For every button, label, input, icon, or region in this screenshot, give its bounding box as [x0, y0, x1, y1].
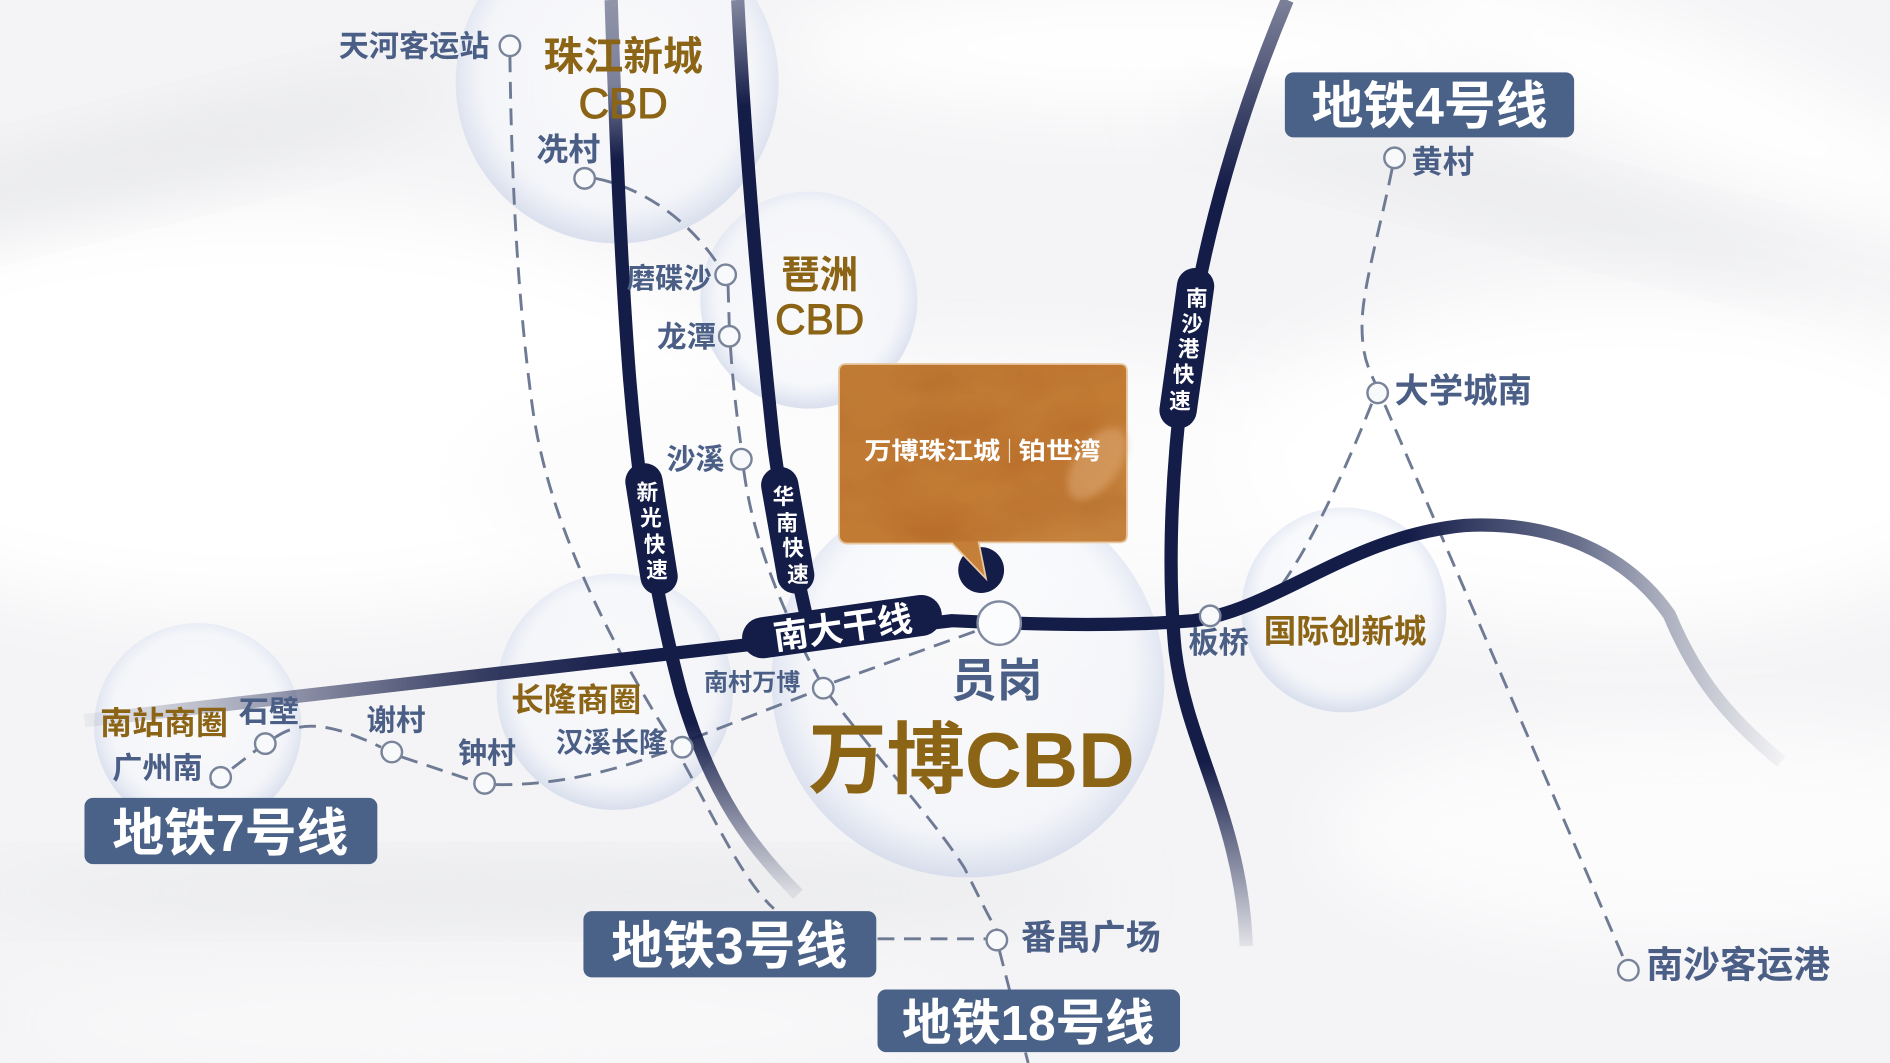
bubble: 南站: [94, 623, 301, 830]
pill label 华南快速: [773, 484, 809, 587]
pill label 华南快速: 华: [773, 484, 794, 509]
station labels: 大学城南: [1395, 373, 1532, 411]
pill label 南沙港快速: 港: [1178, 337, 1200, 362]
pill: 南沙港快速: [1157, 266, 1217, 431]
bubble: 长隆: [497, 574, 733, 810]
badge: 地铁4号线: 地铁4号线: [1311, 77, 1548, 135]
station labels: 石壁: [239, 695, 299, 729]
pill label 南大干线: 南大干线: [771, 599, 915, 657]
station labels: 番禺广场: [1021, 919, 1161, 958]
road: 南大干线: [84, 525, 1781, 762]
pill label 南沙港快速: [1169, 286, 1208, 414]
pill: 华南快速: [758, 464, 817, 596]
pill: 新光快速: [623, 461, 680, 597]
gold labels: CBD: [579, 80, 668, 127]
station labels: 板桥: [1188, 626, 1249, 660]
station labels: 谢村: [366, 704, 426, 737]
pill label 华南快速: 快: [782, 536, 804, 561]
callout card: 万博珠江城 铂世湾: [839, 364, 1138, 579]
pill label 南沙港快速: 南: [1186, 286, 1208, 311]
card title: 万博珠江城: [864, 437, 1000, 465]
pill label 新光快速: 新: [636, 480, 658, 505]
gold labels: 万博CBD: [808, 716, 1135, 804]
station labels: 南村万博: [704, 670, 800, 697]
gold labels: CBD: [775, 296, 864, 343]
pill label 新光快速: [636, 480, 668, 582]
location dot: [958, 547, 1004, 593]
badge: 地铁3号线: 地铁3号线: [611, 917, 847, 975]
pill label 南沙港快速: 沙: [1181, 311, 1203, 336]
card divider: [1009, 439, 1010, 463]
station labels: 黄村: [1411, 144, 1474, 179]
station labels: 钟村: [458, 738, 516, 770]
station labels: 磨碟沙: [627, 263, 712, 295]
road: 南沙港快速: [1171, 0, 1287, 946]
bubble: 国际创新城: [1241, 507, 1446, 712]
gold labels: [100, 35, 1426, 804]
road: 新光快速: [611, 0, 798, 894]
badge: 地铁18号线: 地铁18号线: [902, 996, 1154, 1051]
pill label 华南快速: 南: [776, 510, 798, 535]
bubble: 珠江新城: [456, 0, 779, 243]
bubble: 万博: [771, 484, 1164, 877]
metro line 3 dashed: [510, 55, 774, 909]
metro line 7 dashed: [211, 629, 981, 785]
station labels: 冼村: [536, 131, 600, 167]
bubble: 琶洲: [700, 192, 917, 409]
pill label 南沙港快速: 速: [1169, 389, 1191, 414]
card title right: 铂世湾: [1019, 437, 1100, 465]
gold labels: 长隆商圈: [511, 682, 641, 718]
road: 华南快速: [738, 0, 810, 633]
station labels: 汉溪长隆: [556, 727, 667, 758]
pill label 新光快速: 光: [640, 505, 662, 530]
gold labels: 南站商圈: [100, 705, 228, 741]
station labels: 沙溪: [667, 444, 725, 476]
station labels: 南沙客运港: [1646, 944, 1830, 985]
pill label 华南快速: 速: [787, 562, 809, 587]
stations: [210, 36, 1639, 980]
station labels: 广州南: [112, 752, 203, 786]
station labels: 天河客运站: [339, 30, 489, 64]
station labels: 员岗: [951, 656, 1043, 707]
pill label 新光快速: 速: [646, 557, 668, 582]
gold labels: 珠江新城: [544, 35, 703, 79]
station labels: 龙潭: [657, 321, 716, 354]
gold labels: 琶洲: [781, 254, 858, 297]
gold labels: 国际创新城: [1264, 613, 1426, 649]
metro line 4 dashed: [1220, 169, 1624, 958]
badge: 地铁7号线: 地铁7号线: [112, 804, 348, 862]
metro line 18 dashed: [595, 178, 1028, 1063]
metro line 3 branch to 番禺广场: [878, 938, 986, 940]
pill: 南大干线: [739, 592, 944, 661]
pill label 新光快速: 快: [644, 532, 666, 557]
pill label 南沙港快速: 快: [1173, 362, 1195, 387]
